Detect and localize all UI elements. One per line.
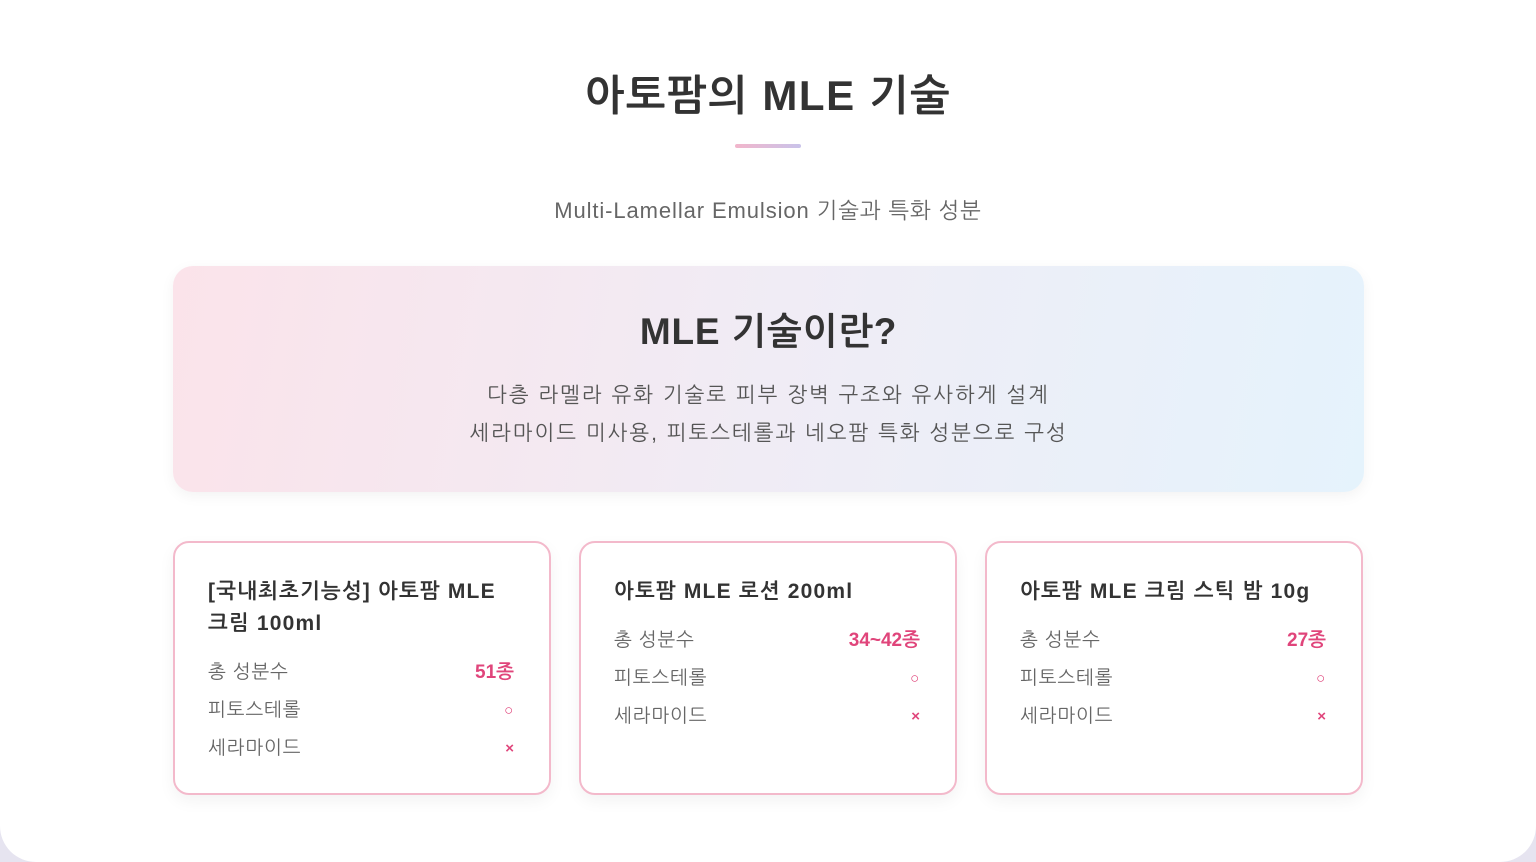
row: total: 34~42종 (849, 630, 920, 651)
row: total: 총 성분수 (1020, 630, 1101, 651)
row: phytosterol: ○ (1316, 670, 1326, 687)
row: total: 27종 (1287, 630, 1326, 651)
text block: description: 다층 라멜라 유화 기술로 피부 장벽 구조와 유사하게 설계 (487, 384, 1050, 407)
panel: card lotion (579, 541, 957, 795)
row: ceramide: 세라마이드 (1020, 706, 1113, 727)
panel: card stick balm (985, 541, 1363, 795)
row: total (208, 662, 514, 683)
title: 아토팜의 MLE 기술 (585, 72, 951, 119)
text block: description: 세라마이드 미사용, 피토스테롤과 네오팜 특화 성분으로 구성 (469, 422, 1068, 445)
row: total (1020, 630, 1326, 651)
row: phytosterol: 피토스테롤 (1020, 668, 1113, 689)
row: ceramide: 세라마이드 (614, 706, 707, 727)
row: phytosterol (614, 668, 920, 689)
row: phytosterol (208, 700, 514, 721)
panel: MLE intro (173, 266, 1364, 492)
card title: 아토팜 MLE 로션 200ml (614, 580, 853, 603)
card title: 크림 100ml (208, 612, 322, 635)
row: total: 총 성분수 (614, 630, 695, 651)
row: phytosterol: ○ (504, 702, 514, 719)
card title: [국내최초기능성] 아토팜 MLE (208, 580, 496, 603)
row: ceramide (614, 706, 920, 727)
row: ceramide (208, 738, 514, 759)
panel: card cream (173, 541, 551, 795)
row: ceramide: 세라마이드 (208, 738, 301, 759)
row: total (614, 630, 920, 651)
row: ceramide: × (505, 740, 514, 757)
text block: description (469, 384, 1068, 445)
heading: MLE 기술이란: MLE 기술이란? (640, 311, 897, 352)
card title (208, 580, 496, 635)
card title: 아토팜 MLE 크림 스틱 밤 10g (1020, 580, 1310, 603)
row: ceramide: × (1317, 708, 1326, 725)
row: phytosterol: 피토스테롤 (614, 668, 707, 689)
row: ceramide: × (911, 708, 920, 725)
row: phytosterol (1020, 668, 1326, 689)
subtitle: Multi-Lamellar Emulsion 기술과 특화 성분 (554, 198, 982, 223)
row: phytosterol: 피토스테롤 (208, 700, 301, 721)
row: total: 총 성분수 (208, 662, 289, 683)
row: ceramide (1020, 706, 1326, 727)
row: phytosterol: ○ (910, 670, 920, 687)
row: total: 51종 (475, 662, 514, 683)
